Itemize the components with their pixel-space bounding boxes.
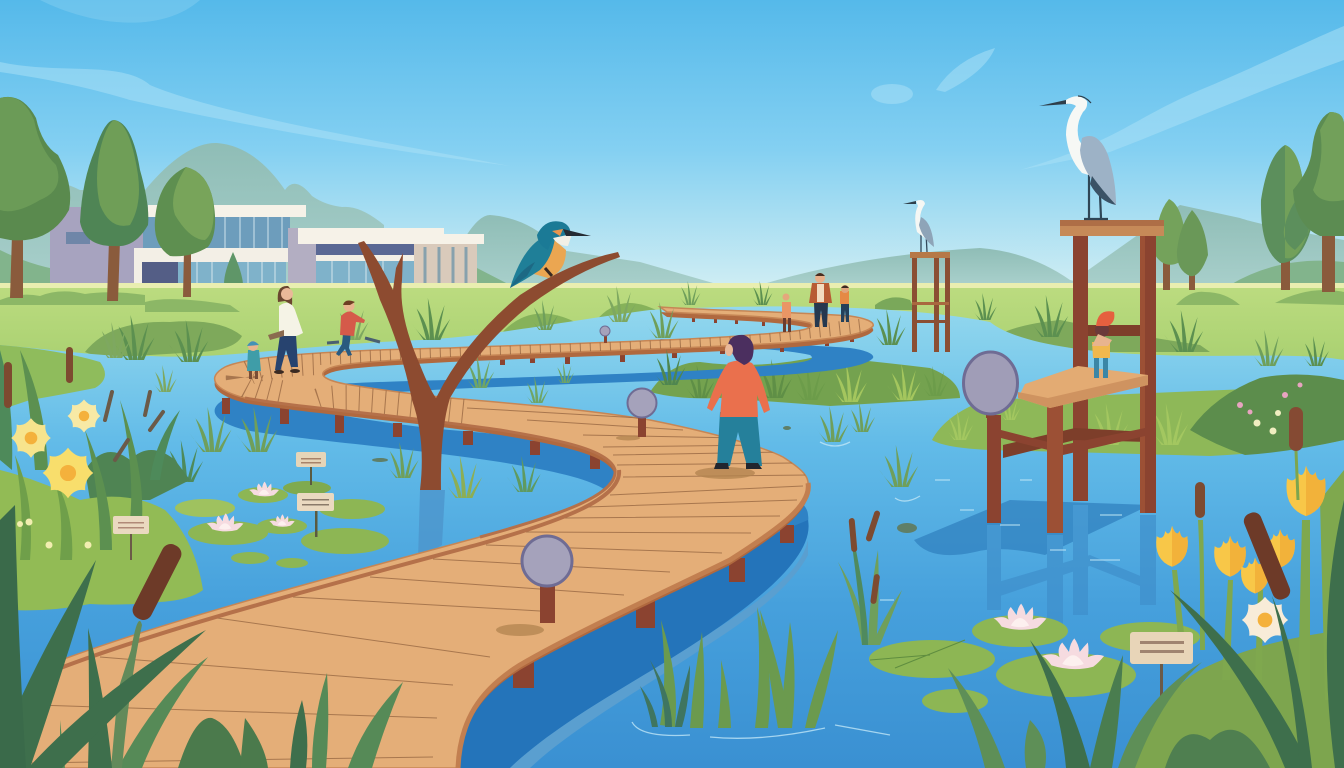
water reeds bbox=[97, 281, 1329, 498]
boy on boardwalk bbox=[327, 300, 380, 356]
right yellow flowers bbox=[1156, 466, 1326, 643]
information signs in pond bbox=[296, 452, 334, 537]
water bbox=[0, 306, 1344, 768]
lily pads and lotus left bbox=[175, 481, 389, 568]
viewing sign on deck large bbox=[522, 536, 572, 623]
kingfisher bbox=[510, 221, 591, 288]
reflection of towers bbox=[914, 500, 1156, 630]
background hills bbox=[0, 143, 1344, 290]
cattails in water bbox=[838, 510, 902, 645]
boardwalk bbox=[28, 307, 873, 768]
right island bbox=[932, 385, 1344, 456]
left flowers bbox=[11, 400, 101, 498]
left foreground plants bbox=[0, 505, 403, 768]
lower deck shadow on water bbox=[450, 520, 809, 768]
small far sign bbox=[600, 326, 610, 343]
ripples bbox=[632, 442, 1122, 738]
big observation tower bbox=[987, 220, 1164, 533]
sign on left shore bbox=[113, 516, 149, 560]
deck shadows on water bbox=[28, 339, 873, 768]
clouds bbox=[0, 0, 1344, 170]
child in orange jacket bbox=[707, 335, 770, 469]
right foreground vegetation bbox=[1130, 470, 1344, 768]
tree reflection bbox=[418, 490, 445, 560]
trees: right group bbox=[1155, 112, 1344, 292]
left shore bbox=[0, 347, 203, 610]
meadow bbox=[0, 283, 1344, 288]
deck posts bbox=[222, 314, 854, 688]
small tower bbox=[910, 252, 950, 352]
trees: left group bbox=[0, 97, 215, 301]
child on tower bbox=[1092, 311, 1114, 378]
small heron bbox=[903, 200, 934, 252]
woman on boardwalk bbox=[268, 286, 303, 374]
right foreground leaves bbox=[948, 500, 1344, 768]
building bbox=[50, 205, 484, 285]
small turtle rocks bbox=[372, 426, 917, 533]
far family on boardwalk bbox=[782, 273, 849, 332]
sky bbox=[0, 0, 1344, 300]
middle island grass bbox=[684, 359, 948, 402]
right island grass bbox=[945, 396, 1188, 445]
left bank bbox=[0, 345, 105, 410]
background bushes bbox=[0, 290, 1344, 312]
middle island bbox=[650, 356, 960, 406]
shadows on the deck bbox=[496, 436, 755, 636]
flowering bush on right island bbox=[1190, 374, 1344, 455]
lily pads right bbox=[869, 604, 1200, 713]
right foreground sign bbox=[1130, 632, 1193, 701]
right cattails bbox=[1195, 407, 1303, 602]
tree and branches bbox=[358, 241, 620, 490]
distant green slopes bbox=[0, 250, 1344, 288]
foreground water reeds bbox=[640, 607, 838, 728]
toddler on boardwalk bbox=[247, 341, 261, 379]
viewing sign on deck small bbox=[628, 388, 656, 437]
shadow edge band bbox=[510, 540, 808, 768]
big heron bbox=[1039, 96, 1116, 219]
viewing sign on tower bbox=[964, 352, 1018, 418]
